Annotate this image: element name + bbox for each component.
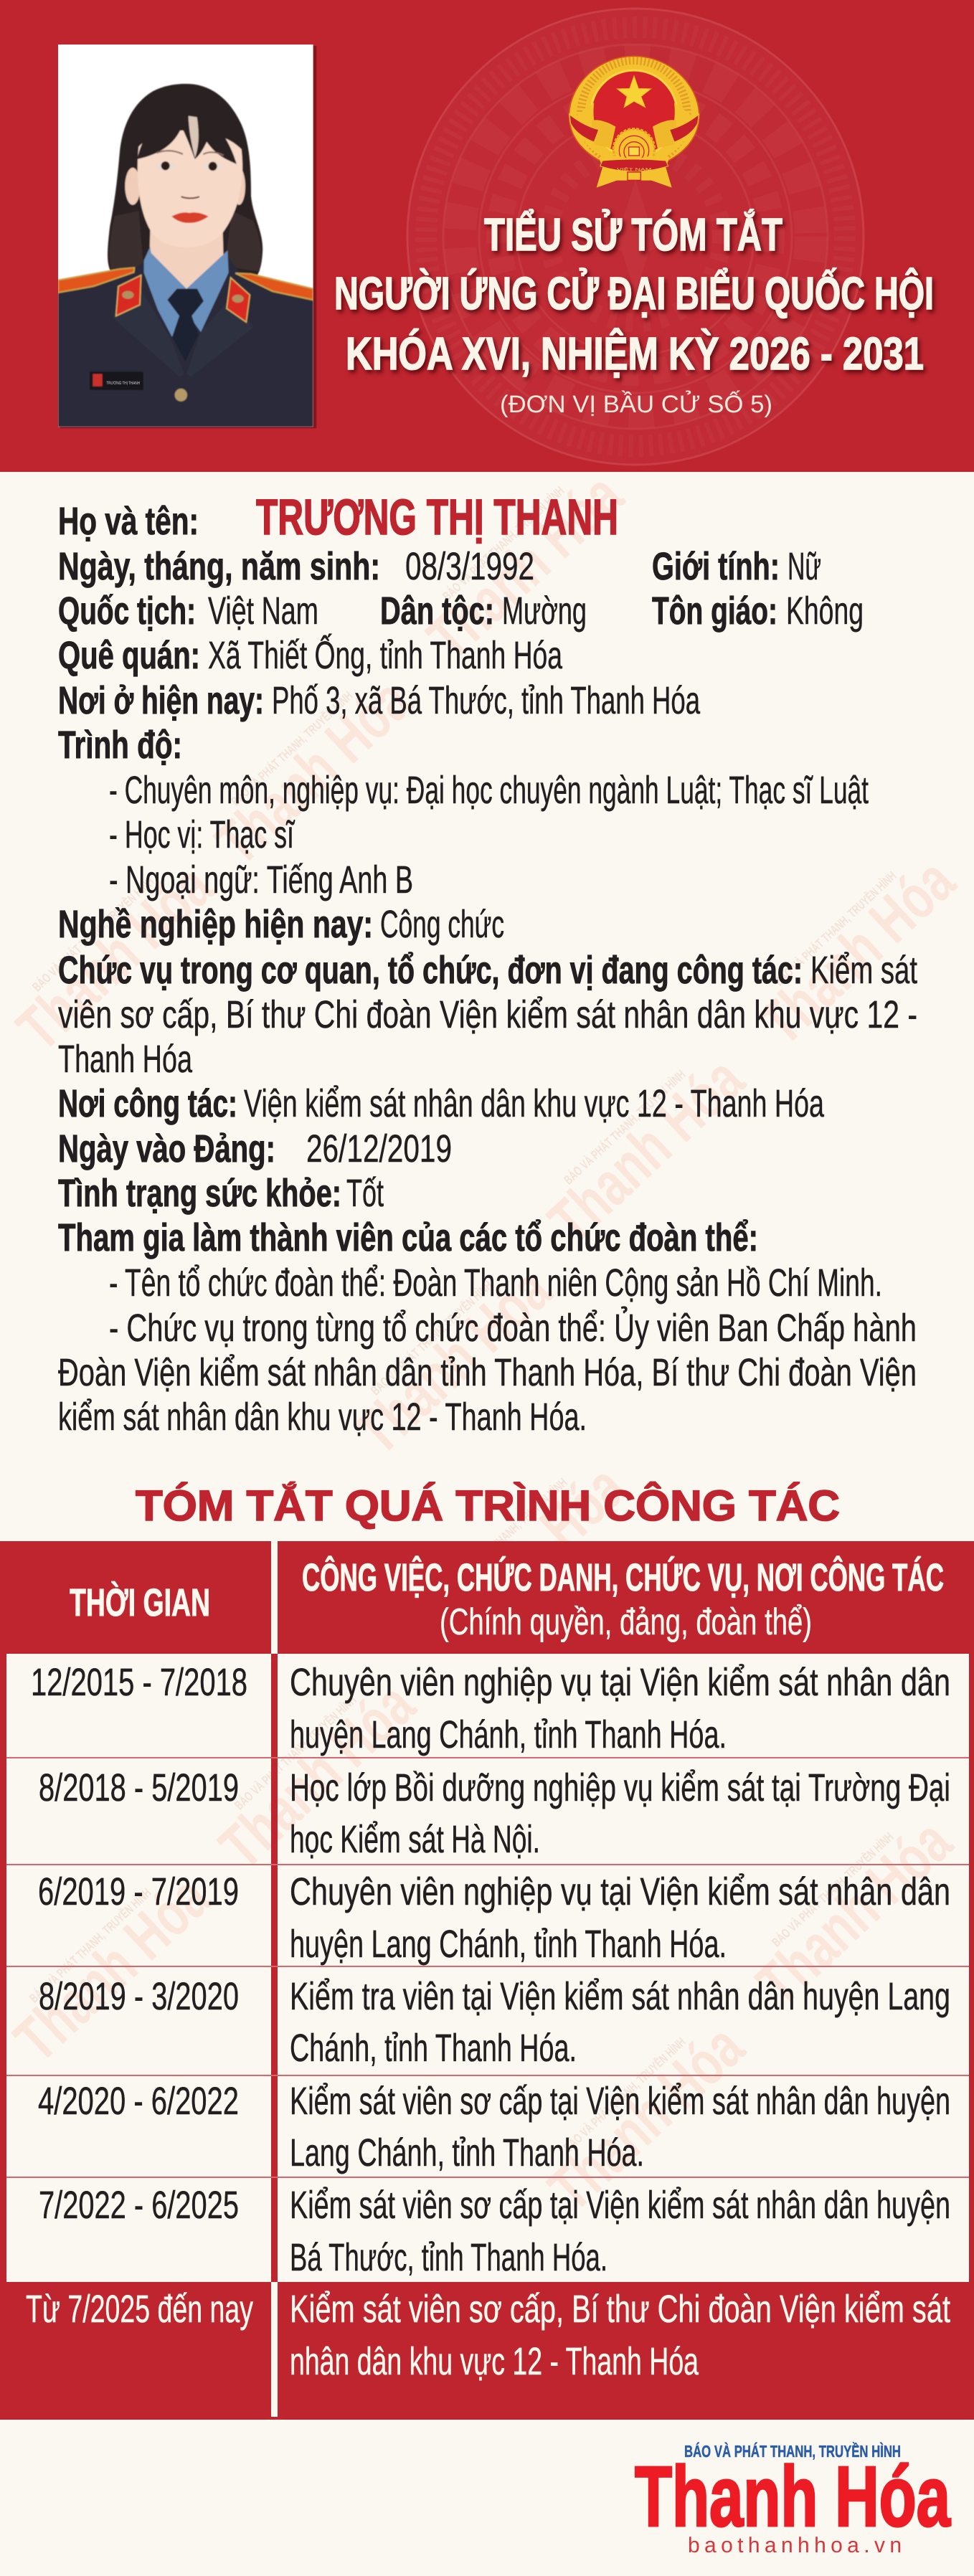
left lapel [113,290,184,377]
row 7: current position: nhân dân khu vực 12 - Thanh Hóa [290,2340,699,2383]
badge emblem [93,374,103,387]
left collar tab [116,275,141,316]
heading: work history: TÓM TẮT QUÁ TRÌNH CÔNG TÁC [136,1482,840,1530]
row 6: Bá Thước, tỉnh Thanh Hóa. [290,2236,607,2279]
watermarks: BÁO VÀ PHÁT THANH, TRUYỀN HÌNH [772,868,899,989]
field: qualifications: - Học vị: Thạc sĩ [109,813,295,856]
watermarks: BÁO VÀ PHÁT THANH, TRUYỀN HÌNH [769,1829,897,1950]
right tab badge [232,295,244,303]
field: nationality, ethnicity, religion: Không [786,589,864,633]
watermarks: Thanh Hóa [417,1451,639,1665]
field: current residence: Phố 3, xã Bá Thước, tỉnh Thanh Hóa [272,679,701,722]
watermarks: BÁO VÀ PHÁT THANH, TRUYỀN HÌNH [232,1692,359,1813]
right epaulette [235,273,313,300]
title: TIỂU SỬ TÓM TẮT [484,209,782,260]
light strand [189,116,199,158]
row 5: 4/2020 - 6/2022 [38,2080,239,2123]
field: position: Kiểm sát [810,949,917,992]
watermarks: Thanh Hóa [535,1043,757,1256]
field: full name: TRƯƠNG THỊ THANH [256,489,618,545]
panel: work history table [0,1541,974,2420]
watermarks: Thanh Hóa [414,459,636,673]
field: nationality, ethnicity, religion: Quốc tịch: [58,589,196,633]
right collar tab [227,278,250,322]
row 4: 8/2019 - 3/2020 [39,1975,239,2018]
field: current residence: Nơi ở hiện nay: [58,679,264,722]
field: qualifications: - Ngoại ngữ: Tiếng Anh B [109,858,413,901]
watermarks: BÁO VÀ PHÁT THANH, TRUYỀN HÌNH [368,1277,496,1398]
field: date of birth and gender: Ngày, tháng, năm sinh: [58,545,380,588]
name badge [90,371,143,390]
watermarks: BÁO VÀ PHÁT THANH, TRUYỀN HÌNH [440,483,567,604]
row 3 [38,1870,950,1966]
tie [167,289,204,361]
row 7: current position [0,2282,974,2420]
fringe [136,129,237,165]
bronze drum background pattern [407,9,864,465]
ribbon [597,156,672,188]
field: current residence [58,679,701,722]
panel: red header [0,0,974,472]
watermarks: BÁO VÀ PHÁT THANH, TRUYỀN HÌNH [27,1885,154,2006]
row 6 [39,2184,950,2279]
blue shirt collar [144,247,229,337]
field: position [58,949,917,1081]
face [138,131,242,247]
watermarks: BÁO VÀ PHÁT THANH, TRUYỀN HÌNH [561,1066,689,1188]
field: qualifications [58,724,869,901]
hair [108,84,263,278]
photo content [58,84,313,427]
lips [171,212,209,223]
right iris [209,162,217,171]
field: hometown: Xã Thiết Ống, tỉnh Thanh Hóa [208,633,563,677]
icon: national emblem [569,56,699,188]
field: hometown: Quê quán: [58,634,200,677]
field: qualifications: Trình độ: [58,724,182,767]
row 2: 8/2018 - 5/2019 [39,1766,239,1809]
field: party admission date: Ngày vào Đảng: [58,1127,275,1170]
row 4 [39,1975,950,2070]
watermarks: Thanh Hóa [342,1254,564,1467]
watermarks: BÁO VÀ PHÁT THANH, TRUYỀN HÌNH [561,2034,689,2155]
logo: Thanh Hoa newspaper: BÁO VÀ PHÁT THANH, TRUYỀN HÌNH [684,2442,901,2461]
icon: portrait photo [58,44,316,428]
neck [149,229,224,290]
field: nationality, ethnicity, religion: Tôn giáo: [652,589,777,633]
field: organisation membership: Tham gia làm thành viên của các tổ chức đoàn thể: [58,1216,758,1259]
row 4: Chánh, tỉnh Thanh Hóa. [290,2027,577,2070]
badge name: TRƯƠNG THỊ THANH [106,380,140,385]
table header [0,1541,974,1654]
nose [181,196,199,198]
field: position: Thanh Hóa [58,1038,193,1081]
jacket [58,255,313,427]
watermarks [0,457,968,2224]
field: workplace [58,1082,825,1125]
row 1: huyện Lang Chánh, tỉnh Thanh Hóa. [290,1713,727,1756]
watermarks: Thanh Hóa [4,850,226,1064]
watermarks: BÁO VÀ PHÁT THANH, TRUYỀN HÌNH [228,688,356,809]
watermarks: Thanh Hóa [206,1668,428,1882]
wheat sheaves [577,103,615,158]
logo: Thanh Hoa newspaper: baothanhhoa.vn [688,2534,902,2557]
field: date of birth and gender: Giới tính: [652,545,780,588]
field: nationality, ethnicity, religion: Mường [502,589,587,633]
field: date of birth and gender: Nữ [788,545,821,588]
ears [125,168,141,205]
left brow [156,151,183,154]
row 7: current position: Từ 7/2025 đến nay [26,2288,253,2331]
watermarks: BÁO VÀ PHÁT THANH, TRUYỀN HÌNH [29,873,157,995]
gear [613,129,655,170]
watermarks: Thanh Hóa [1,1861,223,2075]
right brow [203,152,224,156]
field: nationality, ethnicity, religion [58,589,864,633]
field: date of birth and gender: 08/3/1992 [405,545,534,588]
right eye [203,164,222,170]
right ear [237,171,247,206]
row 2 [39,1766,950,1861]
field: party admission date: 26/12/2019 [306,1127,452,1170]
field: organisation membership [58,1216,917,1439]
table frame [0,1541,974,2420]
left eye [156,162,175,169]
subtitle: (ĐƠN VỊ BẦU CỬ SỐ 5) [500,390,772,418]
jacket button [175,389,187,402]
field: health status: Tốt [346,1172,384,1215]
field: hometown [58,633,563,677]
field: nationality, ethnicity, religion: Dân tộc: [380,589,494,633]
field: nationality, ethnicity, religion: Việt Nam [208,589,318,633]
field: workplace: Nơi công tác: [58,1082,237,1125]
emblem motto: VIỆT NAM [617,167,651,171]
row 1 [31,1661,950,1756]
field: occupation: Nghề nghiệp hiện nay: [58,903,373,946]
field: organisation membership: kiểm sát nhân dân khu vực 12 - Thanh Hóa. [58,1396,587,1439]
table header: THỜI GIAN [70,1581,210,1624]
row 5 [38,2080,950,2174]
row 3: 6/2019 - 7/2019 [38,1870,239,1913]
field: occupation: Công chức [380,903,504,946]
row 5: Lang Chánh, tỉnh Thanh Hóa. [290,2131,644,2174]
table header: (Chính quyền, đảng, đoàn thể) [440,1601,812,1643]
row 6: 7/2022 - 6/2025 [39,2184,239,2227]
left iris [161,161,170,170]
row 3: huyện Lang Chánh, tỉnh Thanh Hóa. [290,1923,727,1966]
left tab badge [122,291,133,299]
row 1: 12/2015 - 7/2018 [31,1661,247,1704]
field: full name [58,489,618,545]
title [334,209,934,379]
left epaulette [58,267,134,293]
field: date of birth and gender [58,545,821,588]
watermarks: Thanh Hóa [535,2010,757,2224]
field: health status: Tình trạng sức khỏe: [58,1172,341,1215]
panel: personal details [58,489,917,1439]
field: full name: Họ và tên: [58,500,199,543]
watermarks: BÁO VÀ PHÁT THANH, TRUYỀN HÌNH [443,1474,570,1596]
row 2: học Kiểm sát Hà Nội. [290,1818,540,1861]
right lapel [186,300,253,377]
watermarks: Thanh Hóa [202,664,425,878]
